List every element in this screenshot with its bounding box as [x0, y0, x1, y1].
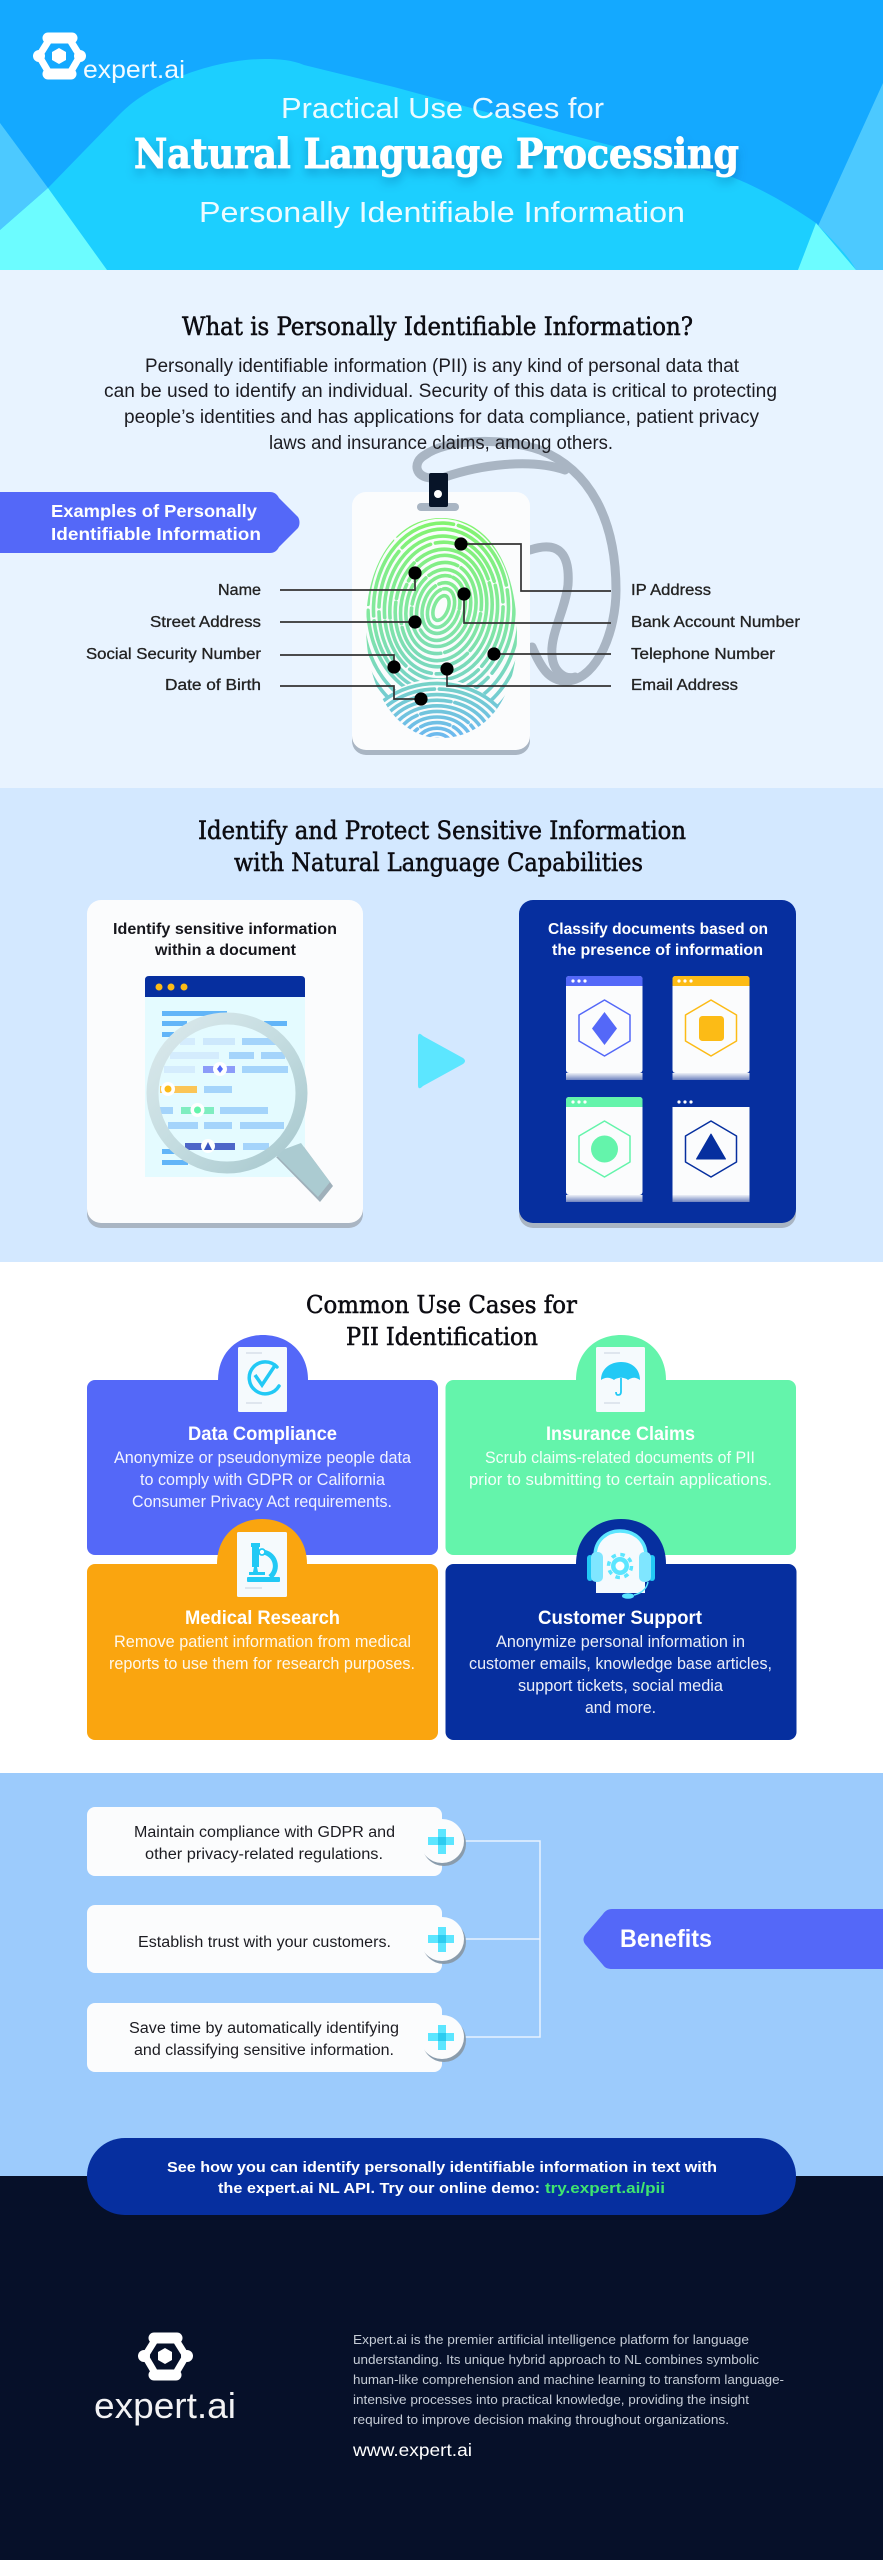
- callout: try the demo: the expert.ai NL API. Try our online demo:: [218, 2180, 540, 2197]
- benefit: compliance: [87, 1807, 466, 1876]
- panel: what is PII: [0, 270, 883, 811]
- benefit: save time: Save time by automatically identifying: [129, 2020, 399, 2037]
- labels: right PII examples: Email Address: [631, 677, 738, 694]
- banner: examples of PII: [0, 492, 300, 553]
- labels: right PII examples: [631, 582, 800, 694]
- website: www.expert.ai: [352, 2440, 472, 2460]
- icon: magnifying glass: [152, 1018, 333, 1202]
- text block: PII definition: laws and insurance claims, among others.: [269, 433, 613, 454]
- labels: left PII examples: Social Security Number: [86, 646, 261, 663]
- panel: footer: [0, 2176, 883, 2560]
- callout lines and data points: [280, 537, 611, 706]
- card: customer support: support tickets, social media: [518, 1677, 724, 1695]
- text block: PII definition: people’s identities and has applications for data compliance, patient privacy: [124, 407, 759, 428]
- text block: about expert.ai: [353, 2332, 784, 2427]
- logo: expert.ai: expert.ai: [83, 56, 185, 84]
- panel: common use cases: [0, 1262, 883, 1773]
- text block: about expert.ai: intensive processes into practical knowledge, providing the insight: [353, 2392, 749, 2407]
- icon: ID badge with fingerprint: [352, 473, 530, 755]
- callout: try the demo: See how you can identify personally identifiable information in text with: [167, 2159, 717, 2176]
- logo: expert.ai footer: [94, 2338, 236, 2426]
- fingerprint: [366, 518, 517, 738]
- title: Practical Use Cases for: [281, 93, 604, 125]
- heading: common use cases: Common Use Cases for: [306, 1290, 577, 1319]
- labels: left PII examples: Street Address: [150, 614, 261, 631]
- heading: identify and protect: with Natural Language Capabilities: [234, 848, 643, 877]
- icon: headset with gear: [587, 1531, 655, 1599]
- card: customer support: Customer Support: [538, 1608, 703, 1629]
- banner: examples of PII: Identifiable Information: [51, 524, 261, 544]
- card: customer support: and more.: [585, 1699, 656, 1717]
- card: medical research: Medical Research: [185, 1608, 340, 1629]
- heading: what is PII: What is Personally Identifiable Information?: [182, 312, 693, 341]
- card: insurance claims: Scrub claims-related documents of PII: [485, 1449, 755, 1467]
- card: data compliance: to comply with GDPR or California: [140, 1471, 386, 1489]
- benefit: compliance: Maintain compliance with GDPR and: [134, 1824, 395, 1841]
- icon: plus: [420, 2015, 466, 2062]
- icon: document navy triangle: [672, 1100, 750, 1202]
- labels: left PII examples: Date of Birth: [165, 677, 261, 694]
- card: identify sensitive information: Identify sensitive information: [113, 921, 337, 938]
- text block: PII definition: Personally identifiable information (PII) is any kind of personal data that: [145, 356, 740, 377]
- benefit: trust: Establish trust with your customers.: [138, 1934, 391, 1951]
- card: insurance claims: Insurance Claims: [546, 1424, 695, 1445]
- connector lines: [464, 1841, 540, 2037]
- labels: right PII examples: Bank Account Number: [631, 614, 800, 631]
- heading: common use cases: [306, 1290, 577, 1351]
- title: [134, 93, 739, 229]
- text block: about expert.ai: human-like comprehension and machine learning to transform language-: [353, 2372, 784, 2387]
- card: customer support: Anonymize personal information in: [496, 1633, 745, 1651]
- banner: examples of PII: Examples of Personally: [51, 501, 257, 521]
- panel: benefits: [0, 1773, 883, 2176]
- logo: expert.ai: [33, 38, 185, 84]
- icon: plus: [420, 1819, 466, 1866]
- logo: expert.ai footer: expert.ai: [94, 2385, 236, 2426]
- text block: about expert.ai: Expert.ai is the premier artificial intelligence platform for language: [353, 2332, 749, 2347]
- card: classify documents: Classify documents based on: [548, 921, 768, 938]
- card: customer support: customer emails, knowledge base articles,: [469, 1655, 772, 1673]
- card: data compliance: [87, 1335, 438, 1555]
- labels: left PII examples: [86, 582, 261, 694]
- card: classify documents: the presence of information: [552, 942, 763, 959]
- labels: left PII examples: Name: [218, 582, 261, 599]
- labels: right PII examples: IP Address: [631, 582, 711, 599]
- benefit: trust: [87, 1905, 466, 1973]
- icon: document with microscope: [237, 1532, 287, 1597]
- panel: identify and protect: [0, 788, 883, 1262]
- card: insurance claims: [446, 1335, 796, 1555]
- title: Personally Identifiable Information: [199, 197, 685, 229]
- callout: try the demo: try.expert.ai/pii: [545, 2180, 665, 2197]
- card: data compliance: Consumer Privacy Act requirements.: [132, 1493, 392, 1511]
- icon: document under magnifier: [145, 976, 333, 1202]
- text block: PII definition: [104, 356, 777, 454]
- text block: PII definition: can be used to identify an individual. Security of this data is critical to protecting: [104, 381, 777, 402]
- icon: plus: [420, 1917, 466, 1964]
- card: customer support: [446, 1519, 796, 1740]
- benefit: save time: [87, 2003, 466, 2072]
- icon: document blue diamond: [566, 976, 642, 1080]
- panel: header: [0, 0, 883, 270]
- heading: identify and protect: [198, 816, 686, 877]
- card: identify sensitive information: within a document: [154, 942, 296, 959]
- text block: about expert.ai: required to improve decision making throughout organizations.: [353, 2412, 729, 2427]
- card: medical research: [87, 1519, 438, 1740]
- title: Natural Language Processing: [134, 130, 739, 178]
- callout: try the demo: [87, 2138, 796, 2215]
- labels: right PII examples: Telephone Number: [631, 646, 775, 663]
- card: identify sensitive information: [87, 900, 363, 1228]
- icon: document yellow square: [672, 976, 750, 1080]
- banner: benefits: Benefits: [620, 1925, 712, 1953]
- icon: document green circle: [566, 1097, 642, 1202]
- card: insurance claims: prior to submitting to certain applications.: [469, 1471, 772, 1489]
- card: medical research: reports to use them for research purposes.: [109, 1655, 415, 1673]
- icon: document with check: [238, 1347, 287, 1412]
- card: data compliance: Data Compliance: [188, 1424, 337, 1445]
- heading: common use cases: PII Identification: [346, 1322, 538, 1351]
- benefit: save time: and classifying sensitive information.: [134, 2042, 394, 2059]
- banner: benefits: [584, 1909, 883, 1969]
- card: classify documents: [519, 900, 796, 1228]
- card: data compliance: Anonymize or pseudonymize people data: [114, 1449, 412, 1467]
- arrow: [418, 1034, 465, 1088]
- icon: document with umbrella: [596, 1347, 645, 1412]
- heading: identify and protect: Identify and Protect Sensitive Information: [198, 816, 686, 845]
- card: medical research: Remove patient information from medical: [114, 1633, 411, 1651]
- benefit: compliance: other privacy-related regulations.: [145, 1846, 383, 1863]
- text block: about expert.ai: understanding. Its unique hybrid approach to NL combines symbolic: [353, 2352, 759, 2367]
- icon: lanyard: [417, 441, 616, 681]
